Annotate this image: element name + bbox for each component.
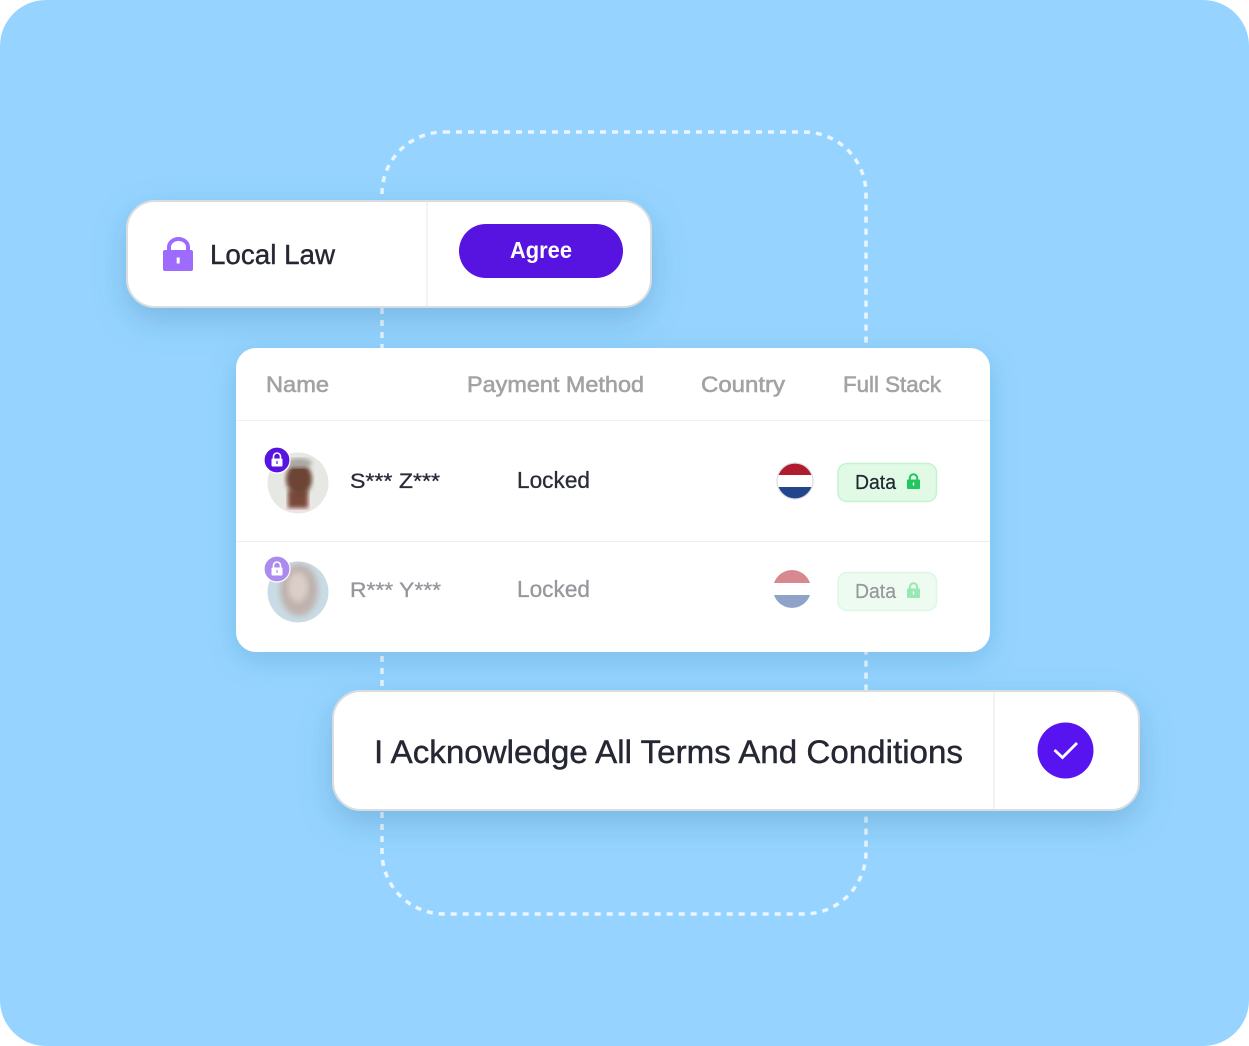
icon: purple padlock: [163, 239, 193, 271]
avatar: blurred woman: [267, 561, 329, 623]
tag: data faded: Data: [855, 581, 897, 603]
name: R*** Y***: [350, 579, 441, 602]
table header: Name: [266, 372, 329, 397]
panel: data table: [236, 348, 990, 652]
badge: lock light: [264, 556, 290, 582]
name: S*** Z***: [350, 470, 440, 493]
card: local law: [127, 201, 651, 307]
flag: netherlands: [776, 462, 814, 500]
tag: data: Data: [855, 472, 897, 494]
table header: Payment Method: [467, 372, 644, 397]
dashed outline frame: [382, 132, 866, 914]
table header: [266, 372, 942, 397]
row 1: [264, 448, 938, 514]
row 2 (faded): [264, 556, 936, 623]
label: local law: Local Law: [210, 239, 336, 270]
payment: Locked: [517, 576, 590, 602]
table header: Full Stack: [843, 372, 942, 397]
button: agree: Agree: [510, 237, 572, 263]
icon: check circle: [1038, 722, 1094, 778]
flag: netherlands faded: [773, 570, 811, 608]
tag: data: [838, 464, 936, 502]
button: agree: [459, 224, 623, 278]
avatar: blurred man: [268, 452, 328, 514]
card: acknowledge terms: [333, 691, 1139, 810]
text: acknowledgement: I Acknowledge All Terms And Conditions: [374, 734, 963, 770]
table header: Country: [701, 372, 785, 397]
badge: lock dark: [264, 447, 290, 473]
tag: data faded: [838, 572, 936, 610]
payment: Locked: [517, 467, 590, 493]
